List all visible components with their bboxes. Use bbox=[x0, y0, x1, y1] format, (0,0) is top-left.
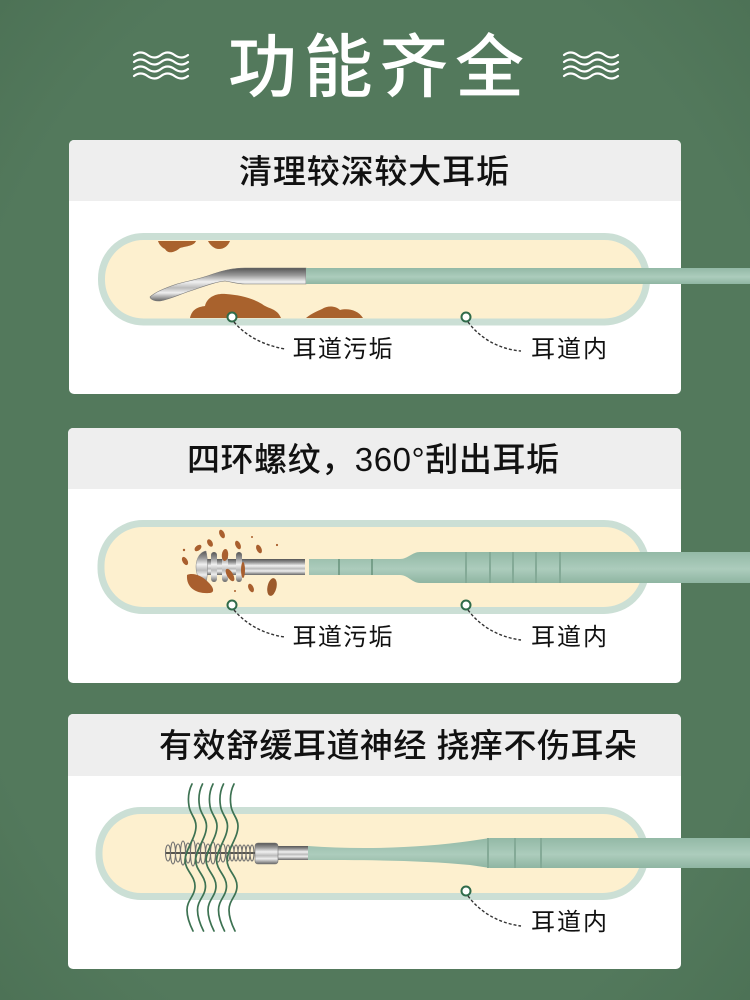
label: inside canal: 耳道内 bbox=[531, 909, 607, 936]
ear canal 3 bbox=[99, 810, 645, 896]
title: 功能齐全 bbox=[228, 29, 524, 106]
metal spiral head bbox=[196, 551, 305, 583]
label: inside canal: 耳道内 bbox=[531, 336, 607, 363]
ear canal 2 bbox=[101, 524, 646, 610]
spiral brush bbox=[166, 840, 255, 866]
marker: inside canal bbox=[462, 886, 521, 926]
panel 2 card bbox=[68, 428, 681, 683]
green handle bbox=[309, 552, 750, 583]
marker: inside canal bbox=[462, 600, 521, 640]
panel 1 heading: 清理较深较大耳垢 bbox=[239, 153, 509, 190]
handle grip notches bbox=[466, 552, 560, 583]
panel 3 header band bbox=[68, 714, 681, 776]
metal scoop tip bbox=[150, 268, 306, 301]
ear canal 1 bbox=[102, 236, 646, 322]
marker: inside canal bbox=[462, 312, 521, 351]
handle grip notches bbox=[488, 838, 541, 868]
green handle bbox=[306, 268, 750, 284]
panel 3 heading: 有效舒缓耳道神经 挠痒不伤耳朵 bbox=[159, 727, 637, 764]
metal ferrule bbox=[255, 843, 308, 864]
panel 1 header band bbox=[69, 140, 681, 201]
icon: right waves bbox=[564, 52, 618, 78]
panel 2 heading: 四环螺纹，360°刮出耳垢 bbox=[187, 441, 559, 478]
earwax flakes bbox=[181, 529, 278, 597]
marker: ear canal wax bbox=[228, 600, 285, 637]
label: inside canal: 耳道内 bbox=[531, 624, 607, 651]
nerve waves bbox=[185, 784, 238, 931]
earwax deposits bbox=[158, 241, 363, 318]
handle rings bbox=[339, 559, 372, 575]
panel 3 card bbox=[68, 714, 681, 969]
label: ear canal wax: 耳道污垢 bbox=[292, 624, 392, 651]
label: ear canal wax: 耳道污垢 bbox=[292, 336, 392, 363]
panel: spiral head bbox=[68, 428, 750, 683]
icon: left waves bbox=[134, 52, 188, 78]
panel 1 card bbox=[69, 140, 681, 394]
marker: ear canal wax bbox=[228, 312, 285, 349]
panel: deep earwax bbox=[69, 140, 750, 394]
green handle bbox=[308, 838, 750, 868]
panel: soothing brush bbox=[68, 714, 750, 969]
panel 2 header band bbox=[68, 428, 681, 489]
